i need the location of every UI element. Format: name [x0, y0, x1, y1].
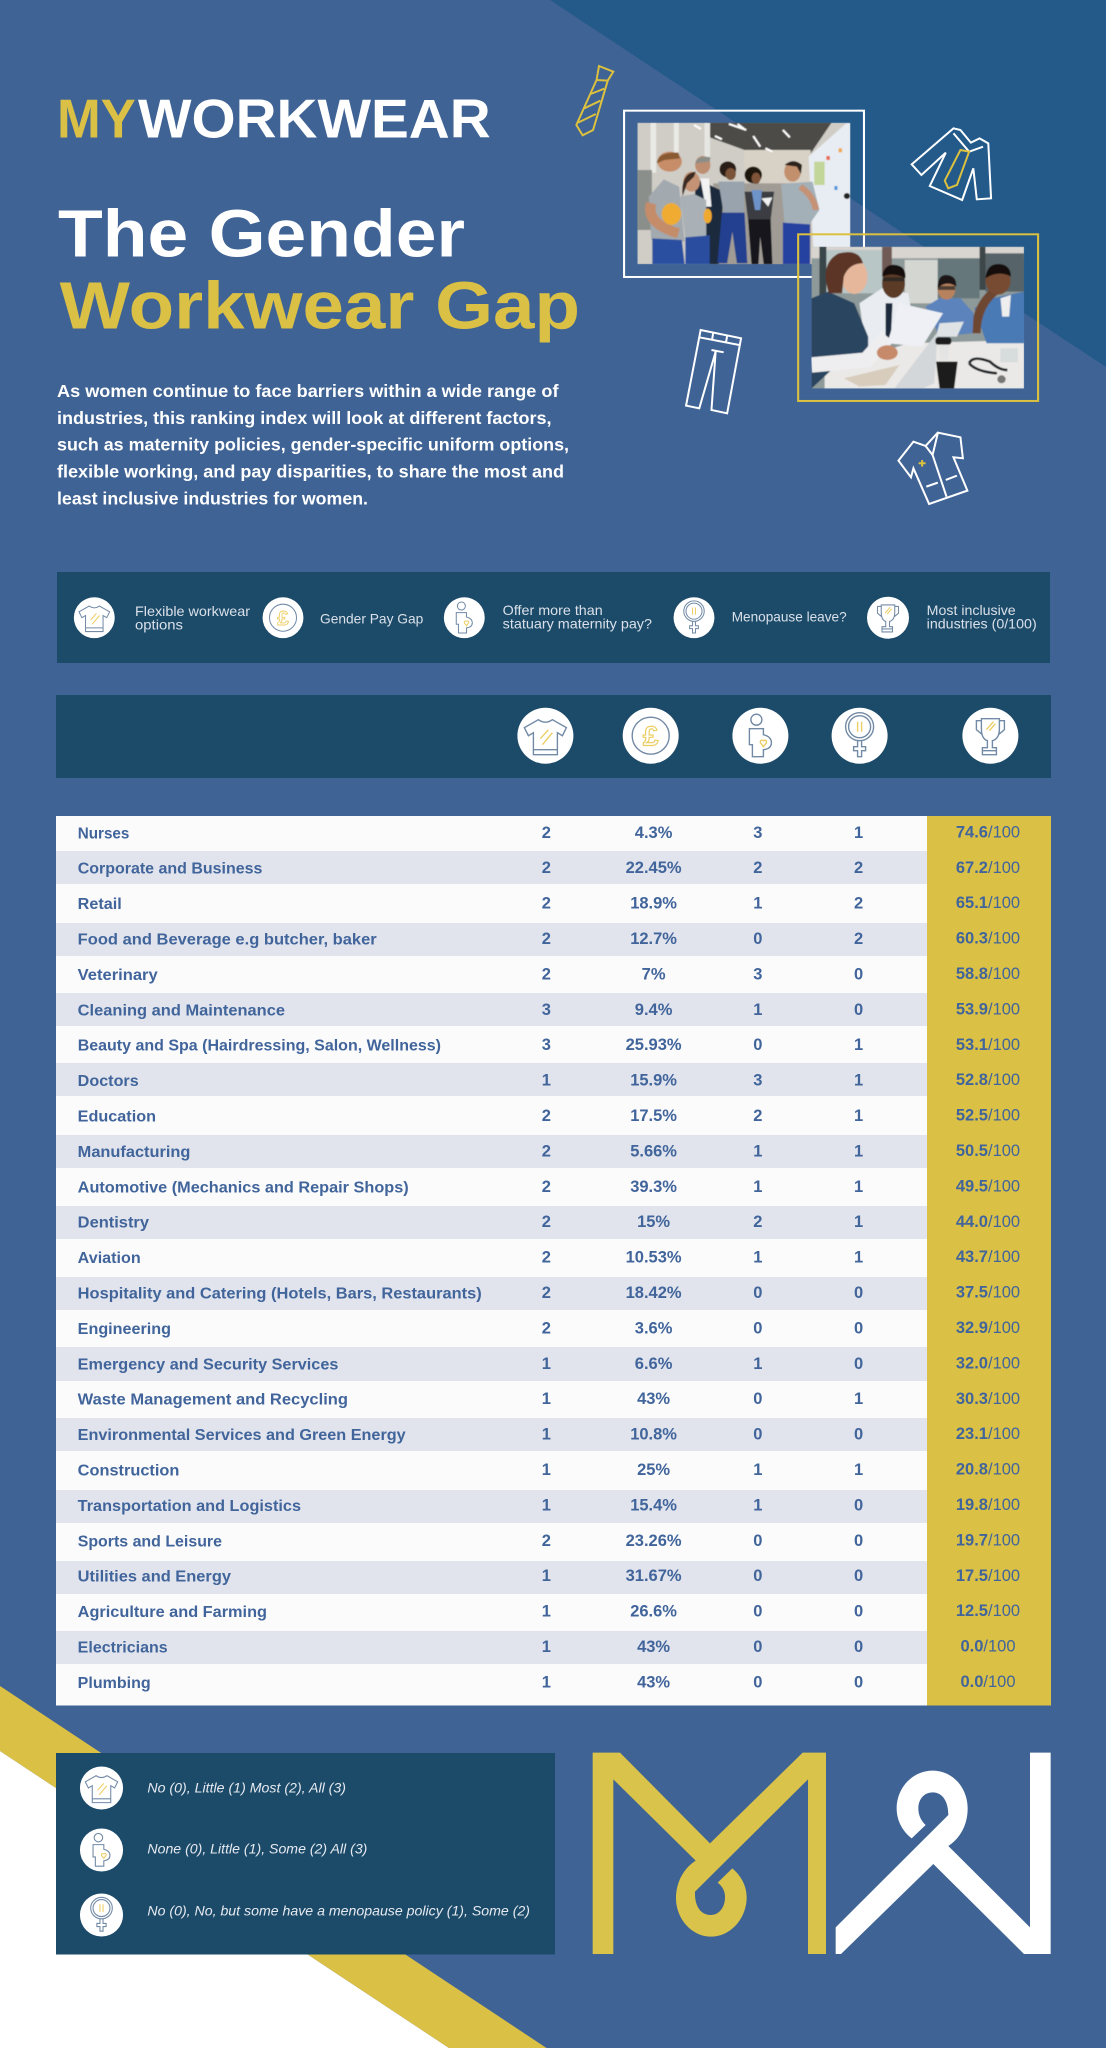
row: Environmental Services and Green Energy: Environmental Services and Green Energy — [78, 1427, 406, 1444]
row: Hospitality and Catering — [56, 1277, 1020, 1310]
row: Emergency and Security Services: Emergency and Security Services — [78, 1356, 338, 1373]
row: Hospitality and Catering: 2 — [542, 1284, 551, 1302]
row: Veterinary: Veterinary — [78, 967, 158, 984]
row: Sports and Leisure: 19.7/100 — [956, 1531, 1020, 1549]
icon: trousers — [686, 330, 741, 413]
row: Engineering: 0 — [753, 1319, 762, 1337]
row: Transportation and Logistics: Transportation and Logistics — [78, 1498, 301, 1515]
row: Education: 52.5/100 — [956, 1107, 1020, 1125]
row: Doctors: 3 — [753, 1072, 762, 1090]
row: Agriculture and Farming: 26.6% — [630, 1603, 677, 1621]
bottom-left gold stripe — [0, 1686, 546, 2048]
row: Corporate and Business: 22.45% — [626, 859, 682, 877]
row: Aviation — [56, 1239, 1020, 1277]
row: Nurses: 3 — [753, 824, 762, 842]
row: Plumbing: 0 — [854, 1673, 863, 1691]
row: Automotive: 39.3% — [630, 1178, 677, 1196]
legend panel: icon key — [57, 572, 1050, 663]
row: Environmental Services and Green Energy: 0 — [854, 1426, 863, 1444]
row: Waste Management and Recycling — [56, 1381, 1020, 1418]
row: Transportation and Logistics — [56, 1490, 1020, 1523]
row: Food and Beverage: 12.7% — [630, 930, 677, 948]
key item: most inclusive — [867, 597, 1037, 639]
key: menopause scale — [80, 1893, 530, 1937]
row: Food and Beverage: 2 — [854, 930, 863, 948]
row: Nurses: 2 — [542, 824, 551, 842]
intro paragraph: As women continue to face barriers within a wide range of — [57, 381, 559, 401]
row: Food and Beverage — [56, 923, 1020, 956]
row: Beauty and Spa: 25.93% — [626, 1036, 682, 1054]
table header with icons — [56, 695, 1051, 778]
row: Plumbing — [56, 1664, 1016, 1706]
title: Workwear Gap — [60, 268, 580, 343]
row: Agriculture and Farming — [56, 1594, 1020, 1631]
row: Retail: 2 — [542, 895, 551, 913]
row: Cleaning and Maintenance: 9.4% — [635, 1001, 673, 1019]
row: Emergency and Security Services — [56, 1347, 1020, 1381]
key item: maternity pay: statuary maternity pay? — [503, 616, 652, 632]
row: Electricians: 0 — [854, 1638, 863, 1656]
key: maternity scale — [80, 1828, 367, 1872]
intro paragraph — [57, 381, 569, 508]
key item: maternity pay — [444, 597, 652, 638]
row: Cleaning and Maintenance: 53.9/100 — [956, 1000, 1020, 1018]
row: Dentistry: 2 — [542, 1213, 551, 1231]
row: Environmental Services and Green Energy: 0 — [753, 1426, 762, 1444]
row: Automotive: 1 — [753, 1178, 762, 1196]
row: Dentistry: Dentistry — [78, 1215, 149, 1232]
row: Cleaning and Maintenance: 1 — [753, 1001, 762, 1019]
row: Plumbing: Plumbing — [78, 1675, 151, 1692]
row: Food and Beverage: 2 — [542, 930, 551, 948]
row: Education: 1 — [854, 1107, 863, 1125]
row: Transportation and Logistics: 15.4% — [630, 1496, 677, 1514]
row: Hospitality and Catering: 18.42% — [626, 1284, 682, 1302]
row: Agriculture and Farming: Agriculture and Farming — [78, 1604, 267, 1621]
row: Utilities and Energy: 31.67% — [626, 1567, 682, 1585]
row: Beauty and Spa: 53.1/100 — [956, 1036, 1020, 1054]
row: Veterinary: 2 — [542, 965, 551, 983]
row: Beauty and Spa: 1 — [854, 1036, 863, 1054]
row: Construction: 20.8/100 — [956, 1461, 1020, 1479]
row: Engineering — [56, 1310, 1020, 1347]
row: Agriculture and Farming: 0 — [753, 1603, 762, 1621]
row: Emergency and Security Services: 1 — [753, 1355, 762, 1373]
row: Cleaning and Maintenance: 3 — [542, 1001, 551, 1019]
photo: factory team with white frame — [624, 111, 864, 277]
row: Education: 17.5% — [630, 1107, 677, 1125]
row: Electricians: 0 — [753, 1638, 762, 1656]
row: Utilities and Energy: 17.5/100 — [956, 1567, 1020, 1585]
key item: flexible workwear: options — [135, 616, 183, 632]
row: Construction: 1 — [542, 1461, 551, 1479]
row: Manufacturing: 2 — [542, 1142, 551, 1160]
row: Retail: Retail — [78, 896, 122, 913]
row: Cleaning and Maintenance: 0 — [854, 1001, 863, 1019]
key: workwear scale: No (0), Little (1) Most (2), All (3) — [147, 1780, 346, 1796]
row: Waste Management and Recycling: 1 — [542, 1390, 551, 1408]
row: Waste Management and Recycling: 0 — [753, 1390, 762, 1408]
row: Engineering: 2 — [542, 1319, 551, 1337]
row: Construction: 25% — [637, 1461, 670, 1479]
row: Beauty and Spa: 3 — [542, 1036, 551, 1054]
intro paragraph: industries, this ranking index will look at different factors, — [57, 408, 552, 428]
row: Electricians — [56, 1631, 1016, 1664]
row: Engineering: 0 — [854, 1319, 863, 1337]
row: Electricians: 0.0/100 — [960, 1638, 1016, 1656]
row: Utilities and Energy — [56, 1561, 1020, 1594]
row: Engineering: 32.9/100 — [956, 1319, 1020, 1337]
key item: menopause leave: Menopause leave? — [732, 609, 847, 625]
row: Automotive — [56, 1168, 1020, 1206]
scoring key panel — [56, 1753, 555, 1954]
row: Environmental Services and Green Energy: 10.8% — [630, 1426, 677, 1444]
key item: flexible workwear — [74, 597, 250, 638]
row: Doctors: 1 — [854, 1072, 863, 1090]
row: Sports and Leisure: Sports and Leisure — [78, 1533, 222, 1550]
row: Construction: 1 — [753, 1461, 762, 1479]
intro paragraph: flexible working, and pay disparities, to share the most and — [57, 462, 564, 482]
row: Dentistry — [56, 1206, 1020, 1239]
row: Beauty and Spa: 0 — [753, 1036, 762, 1054]
row: Dentistry: 44.0/100 — [956, 1213, 1020, 1231]
row: Construction: Construction — [78, 1462, 179, 1480]
row: Utilities and Energy: 1 — [542, 1567, 551, 1585]
row: Dentistry: 1 — [854, 1213, 863, 1231]
row: Environmental Services and Green Energy: 1 — [542, 1426, 551, 1444]
row: Emergency and Security Services: 0 — [854, 1355, 863, 1373]
row: Plumbing: 0.0/100 — [960, 1673, 1016, 1691]
row: Electricians: 43% — [637, 1638, 670, 1656]
row: Automotive: 49.5/100 — [956, 1177, 1020, 1195]
row: Hospitality and Catering: Hospitality and Catering (Hotels, Bars, Restaurants) — [78, 1286, 482, 1302]
row: Manufacturing: 5.66% — [630, 1142, 677, 1160]
row: Education: 2 — [542, 1107, 551, 1125]
logo wordmark: WORKWEAR — [138, 88, 491, 150]
row: Electricians: Electricians — [78, 1640, 168, 1656]
title: The Gender — [58, 197, 465, 272]
row: Sports and Leisure: 0 — [753, 1532, 762, 1550]
key item: flexible workwear: Flexible workwear — [135, 603, 250, 619]
row: Manufacturing: 50.5/100 — [956, 1142, 1020, 1160]
row: Cleaning and Maintenance — [56, 993, 1020, 1026]
row: Retail: 18.9% — [630, 895, 677, 913]
intro paragraph: such as maternity policies, gender-specific uniform options, — [57, 435, 569, 455]
row: Plumbing: 0 — [753, 1673, 762, 1691]
intro paragraph: least inclusive industries for women. — [57, 488, 368, 508]
photo: medical team with gold frame — [798, 234, 1038, 401]
row: Doctors: 15.9% — [630, 1072, 677, 1090]
row: Transportation and Logistics: 0 — [854, 1496, 863, 1514]
row: Construction: 1 — [854, 1461, 863, 1479]
row: Veterinary: 3 — [753, 965, 762, 983]
row: Agriculture and Farming: 12.5/100 — [956, 1602, 1020, 1620]
row: Hospitality and Catering: 0 — [854, 1284, 863, 1302]
key item: most inclusive: Most inclusive — [927, 602, 1016, 618]
icon: scrub top — [898, 433, 967, 504]
row: Nurses: 74.6/100 — [956, 823, 1020, 841]
key item: menopause leave — [674, 597, 847, 638]
row: Doctors — [56, 1063, 1020, 1096]
icon: jacket — [912, 128, 991, 200]
icon: tie — [576, 66, 613, 135]
row: Retail: 65.1/100 — [956, 894, 1020, 912]
row: Education — [56, 1096, 1020, 1135]
row: Waste Management and Recycling: 1 — [854, 1390, 863, 1408]
logo mark: M and W hanger — [593, 1753, 1051, 1954]
row: Corporate and Business — [56, 851, 1020, 884]
row: Waste Management and Recycling: 30.3/100 — [956, 1390, 1020, 1408]
row: Utilities and Energy: 0 — [854, 1567, 863, 1585]
row: Retail: 2 — [854, 895, 863, 913]
row: Nurses: 1 — [854, 824, 863, 842]
row: Retail: 1 — [753, 895, 762, 913]
row: Aviation: 43.7/100 — [956, 1248, 1020, 1266]
row: Education: 2 — [753, 1107, 762, 1125]
row: Nurses — [56, 816, 1020, 851]
row: Corporate and Business: 2 — [542, 859, 551, 877]
row: Beauty and Spa: Beauty and Spa (Hairdressing, Salon, Wellness) — [78, 1038, 441, 1055]
row: Doctors: 1 — [542, 1072, 551, 1090]
row: Hospitality and Catering: 37.5/100 — [956, 1284, 1020, 1302]
row: Sports and Leisure: 23.26% — [626, 1532, 682, 1550]
row: Manufacturing: 1 — [854, 1142, 863, 1160]
row: Doctors: 52.8/100 — [956, 1071, 1020, 1089]
row: Cleaning and Maintenance: Cleaning and Maintenance — [78, 1002, 285, 1019]
key: menopause scale: No (0), No, but some have a menopause policy (1), Some (2) — [147, 1903, 530, 1919]
row: Aviation: 2 — [542, 1249, 551, 1267]
row: Corporate and Business: Corporate and Business — [78, 861, 262, 878]
row: Veterinary — [56, 956, 1020, 993]
row: Automotive: Automotive (Mechanics and Repair Shops) — [78, 1179, 409, 1196]
row: Retail — [56, 884, 1020, 923]
top-right dark diagonal — [550, 0, 1106, 367]
row: Corporate and Business: 67.2/100 — [956, 859, 1020, 877]
row: Environmental Services and Green Energy: 23.1/100 — [956, 1425, 1020, 1443]
key item: gender pay gap: Gender Pay Gap — [320, 610, 424, 626]
row: Agriculture and Farming: 1 — [542, 1603, 551, 1621]
row: Corporate and Business: 2 — [753, 859, 762, 877]
row: Sports and Leisure — [56, 1523, 1020, 1561]
row: Dentistry: 15% — [637, 1213, 670, 1231]
row: Construction — [56, 1451, 1020, 1490]
row: Food and Beverage: 60.3/100 — [956, 930, 1020, 948]
row: Sports and Leisure: 0 — [854, 1532, 863, 1550]
row: Transportation and Logistics: 1 — [753, 1496, 762, 1514]
row: Food and Beverage: Food and Beverage e.g butcher, baker — [78, 932, 377, 948]
row: Engineering: 3.6% — [635, 1319, 673, 1337]
row: Nurses: 4.3% — [635, 824, 673, 842]
row: Aviation: Aviation — [78, 1250, 141, 1267]
row: Environmental Services and Green Energy — [56, 1418, 1020, 1451]
row: Corporate and Business: 2 — [854, 859, 863, 877]
row: Agriculture and Farming: 0 — [854, 1603, 863, 1621]
row: Sports and Leisure: 2 — [542, 1532, 551, 1550]
key item: most inclusive: industries (0/100) — [927, 616, 1037, 632]
row: Emergency and Security Services: 6.6% — [635, 1355, 673, 1373]
key item: maternity pay: Offer more than — [503, 602, 603, 618]
row: Automotive: 1 — [854, 1178, 863, 1196]
key: maternity scale: None (0), Little (1), Some (2) All (3) — [147, 1840, 367, 1856]
row: Plumbing: 1 — [542, 1673, 551, 1691]
row: Manufacturing: 1 — [753, 1142, 762, 1160]
row: Automotive: 2 — [542, 1178, 551, 1196]
row: Dentistry: 2 — [753, 1213, 762, 1231]
row: Emergency and Security Services: 32.0/100 — [956, 1354, 1020, 1372]
row: Hospitality and Catering: 0 — [753, 1284, 762, 1302]
row: Veterinary: 0 — [854, 965, 863, 983]
title — [58, 197, 580, 343]
row: Manufacturing — [56, 1135, 1020, 1168]
key item: gender pay gap — [263, 597, 424, 638]
row: Nurses: Nurses — [78, 825, 129, 842]
row: Aviation: 10.53% — [626, 1249, 682, 1267]
row: Aviation: 1 — [854, 1249, 863, 1267]
row: Waste Management and Recycling: 43% — [637, 1390, 670, 1408]
row: Food and Beverage: 0 — [753, 930, 762, 948]
row: Veterinary: 58.8/100 — [956, 965, 1020, 983]
row: Waste Management and Recycling: Waste Management and Recycling — [78, 1392, 348, 1409]
row: Emergency and Security Services: 1 — [542, 1355, 551, 1373]
row: Veterinary: 7% — [642, 965, 666, 983]
row: Utilities and Energy: 0 — [753, 1567, 762, 1585]
row: Engineering: Engineering — [78, 1321, 171, 1338]
row: Education: Education — [78, 1108, 156, 1126]
ranking table — [56, 816, 1051, 1706]
row: Transportation and Logistics: 1 — [542, 1496, 551, 1514]
row: Utilities and Energy: Utilities and Energy — [78, 1569, 231, 1586]
key: workwear scale — [80, 1766, 346, 1810]
row: Beauty and Spa — [56, 1026, 1020, 1063]
row: Electricians: 1 — [542, 1638, 551, 1656]
row: Doctors: Doctors — [78, 1073, 139, 1090]
row: Plumbing: 43% — [637, 1673, 670, 1691]
row: Aviation: 1 — [753, 1249, 762, 1267]
row: Manufacturing: Manufacturing — [78, 1144, 190, 1161]
bottom-left white corner — [0, 1751, 449, 2048]
logo wordmark: MY — [57, 88, 136, 150]
row: Transportation and Logistics: 19.8/100 — [956, 1496, 1020, 1514]
